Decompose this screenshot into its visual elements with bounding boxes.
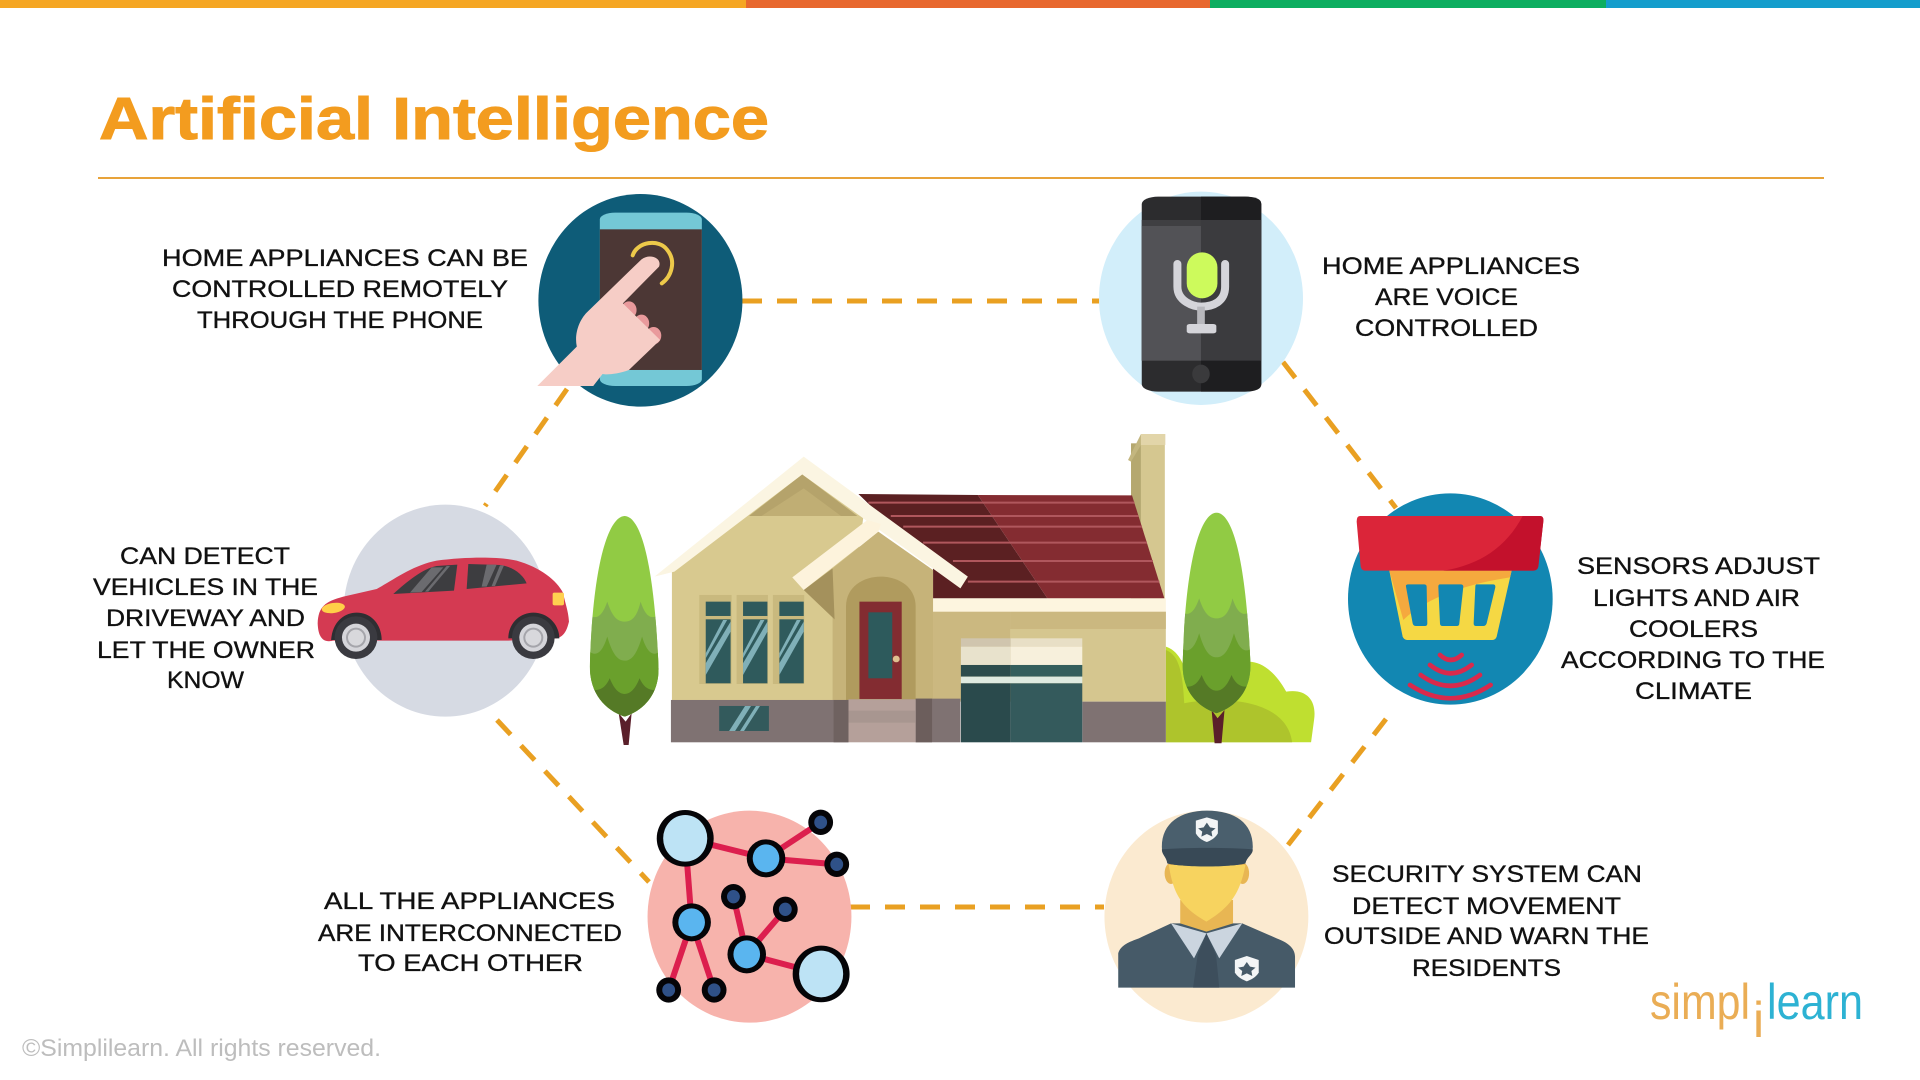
- top colour bar: [0, 0, 1920, 8]
- caption: climate sensors: CLIMATE: [1635, 678, 1752, 705]
- icon: house with trees and bush: [585, 434, 1315, 745]
- logo: simplilearn: [1650, 974, 1863, 1048]
- caption: remote control: CONTROLLED REMOTELY: [172, 276, 508, 303]
- caption: remote control: [162, 245, 528, 334]
- icon: connected network: [648, 810, 851, 1023]
- icon: phone with microphone: [1099, 192, 1303, 405]
- icon: red car: [318, 505, 569, 717]
- caption: interconnected appliances: TO EACH OTHER: [358, 950, 583, 977]
- caption: interconnected appliances: [318, 888, 622, 977]
- caption: climate sensors: SENSORS ADJUST: [1577, 553, 1820, 580]
- caption: remote control: HOME APPLIANCES CAN BE: [162, 245, 528, 272]
- caption: remote control: THROUGH THE PHONE: [197, 307, 483, 334]
- icon: ceiling sensor: [1348, 493, 1553, 705]
- icon: hand tapping phone: [537, 194, 742, 407]
- caption: vehicle detection: [93, 543, 318, 694]
- logo: simplilearn: learn: [1767, 974, 1863, 1030]
- caption: vehicle detection: VEHICLES IN THE: [93, 574, 318, 601]
- caption: climate sensors: ACCORDING TO THE: [1561, 647, 1825, 674]
- caption: security system: RESIDENTS: [1412, 955, 1561, 982]
- dashed hexagon connectors: [485, 301, 1396, 907]
- caption: security system: [1324, 861, 1649, 982]
- caption: voice control: HOME APPLIANCES: [1322, 253, 1580, 280]
- caption: voice control: CONTROLLED: [1355, 315, 1538, 342]
- caption: voice control: [1322, 253, 1580, 342]
- caption: security system: DETECT MOVEMENT: [1352, 893, 1621, 920]
- caption: voice control: ARE VOICE: [1375, 284, 1518, 311]
- caption: climate sensors: COOLERS: [1629, 616, 1758, 643]
- caption: climate sensors: LIGHTS AND AIR: [1593, 585, 1800, 612]
- caption: interconnected appliances: ALL THE APPLIANCES: [324, 888, 615, 915]
- icon: security guard: [1104, 811, 1308, 1023]
- logo: simplilearn: simpl: [1650, 974, 1750, 1030]
- caption: security system: OUTSIDE AND WARN THE: [1324, 923, 1649, 950]
- caption: interconnected appliances: ARE INTERCONNECTED: [318, 920, 622, 947]
- caption: vehicle detection: LET THE OWNER: [97, 637, 315, 664]
- title: Artificial Intelligence: [99, 86, 769, 152]
- logo: simplilearn: i: [1753, 992, 1764, 1048]
- copyright notice: ©Simplilearn. All rights reserved.: [22, 1035, 381, 1062]
- caption: vehicle detection: KNOW: [167, 667, 244, 694]
- caption: climate sensors: [1561, 553, 1825, 705]
- caption: vehicle detection: CAN DETECT: [120, 543, 290, 570]
- caption: security system: SECURITY SYSTEM CAN: [1332, 861, 1642, 888]
- caption: vehicle detection: DRIVEWAY AND: [106, 605, 305, 632]
